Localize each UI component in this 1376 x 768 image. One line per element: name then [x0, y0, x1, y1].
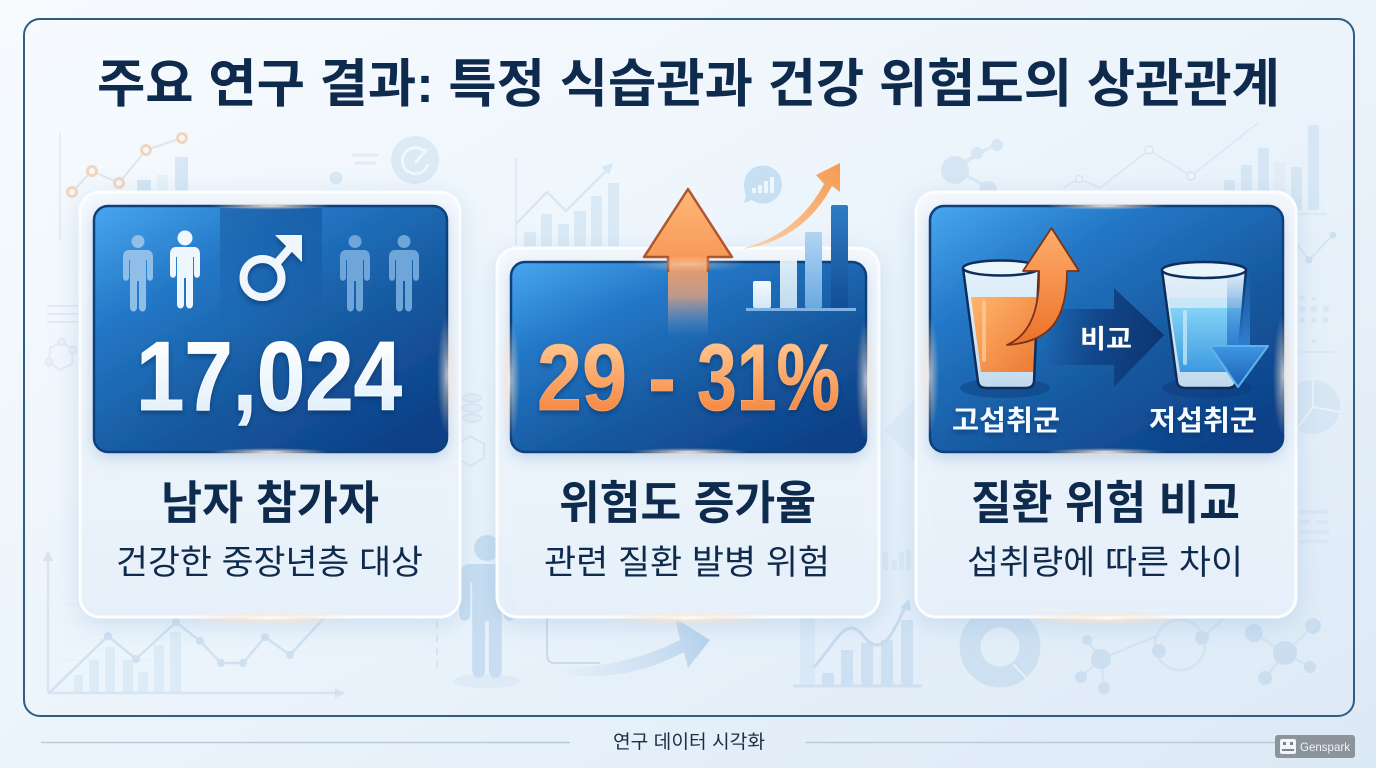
blue stat panel: [94, 206, 447, 452]
background: faint data illustrations: [43, 123, 1340, 698]
icon: blue falling arrow: [1210, 272, 1268, 387]
heading: 위험도 증가율: [559, 467, 816, 533]
centre band behind male symbol: [220, 208, 322, 326]
card background: [916, 192, 1296, 617]
icon: low intake water glass: [1162, 262, 1252, 398]
card background: [80, 192, 460, 617]
background chart: bottom left: [43, 550, 345, 698]
background lines: right list: [1299, 510, 1329, 543]
badge: Genspark: Genspark: [1300, 740, 1351, 754]
bar chart: [746, 205, 856, 311]
subheading: 건강한 중장년층 대상: [116, 535, 423, 584]
background chart: top left orange line: [60, 133, 188, 240]
icon: curved growth arrow: [742, 163, 840, 249]
heading: 질환 위험 비교: [971, 467, 1240, 533]
heading: 남자 참가자: [161, 467, 379, 533]
icon: high intake juice glass: [960, 260, 1050, 398]
subheading: 섭취량에 따른 차이: [967, 535, 1243, 584]
risk percentage: 29: [537, 325, 627, 431]
arrow: comparison: [1045, 288, 1164, 387]
risk percentage: [537, 325, 840, 431]
background icon: database stack and hexagon: [457, 394, 484, 466]
panel: risk increase card: [497, 163, 879, 625]
icon: chat bubble with bars: [744, 166, 782, 204]
background molecule: left: [46, 306, 78, 370]
background chart: rising bars above card two: [516, 158, 619, 247]
background donut chart: [970, 617, 1030, 682]
risk percentage: 31%: [697, 325, 840, 431]
footer caption: 연구 데이터 시각화: [613, 727, 765, 754]
card background: [497, 248, 879, 617]
low intake group label: 저섭취군: [1149, 399, 1257, 439]
compare label: 비교: [1080, 319, 1132, 356]
blue stat panel: [930, 206, 1283, 452]
title: 주요 연구 결과: 특정 식습관과 건강 위험도의 상관관계: [97, 42, 1280, 117]
panel: disease risk comparison card: [916, 192, 1296, 625]
edge glows: [500, 256, 876, 625]
badge: Genspark: [1275, 735, 1355, 758]
icon: male symbol: [244, 235, 302, 297]
background arrow: between cards two and three: [885, 398, 915, 462]
background pie: right: [1286, 380, 1340, 434]
edge glows: [185, 202, 457, 625]
blue stat panel: [511, 262, 866, 452]
background icon: gauge: [330, 136, 439, 184]
edge glows: [919, 202, 1293, 625]
icon: people row: [123, 230, 419, 312]
background molecule: top right: [941, 139, 1003, 199]
up arrow outline: [644, 189, 732, 272]
background arrow: bottom centre: [547, 600, 710, 676]
background chart: bottom centre bars: [793, 550, 922, 686]
panel: participants card: [80, 192, 460, 625]
icon: large up arrow: [644, 189, 732, 338]
background chart: right bars and line: [1063, 123, 1336, 352]
high intake group label: 고섭취군: [952, 399, 1060, 439]
risk percentage: -: [648, 325, 676, 431]
icon: orange rising arrow: [1007, 228, 1079, 345]
background figure: standing person: [437, 535, 521, 688]
subheading: 관련 질환 발병 위험: [544, 535, 830, 584]
background molecule: bottom right pair: [1075, 618, 1321, 694]
participant count: 17,024: [136, 321, 402, 431]
